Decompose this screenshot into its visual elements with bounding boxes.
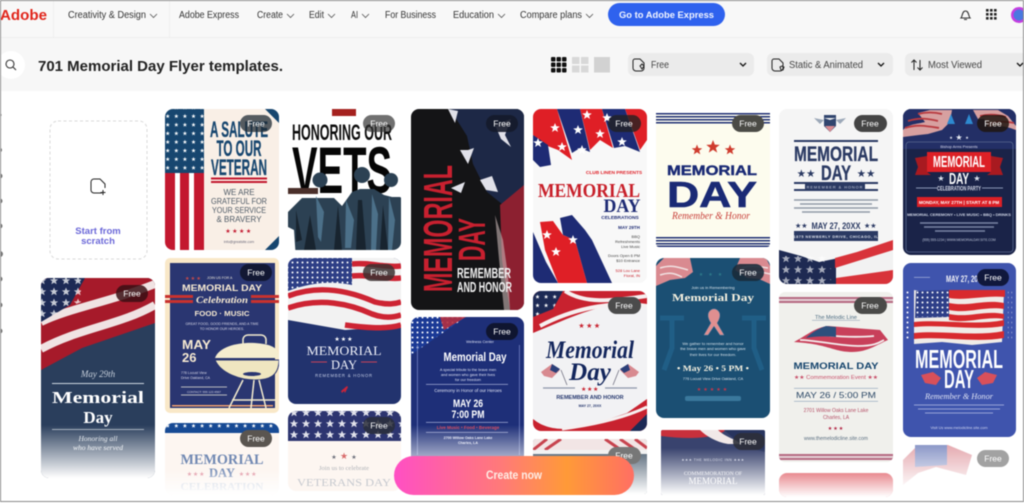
badge: Free [608, 115, 641, 132]
badge: Free: Free [493, 118, 511, 128]
card: memorial day celebration grill [165, 258, 279, 413]
card: celebration party navy: CELEBRATION PARTY [937, 186, 981, 192]
card: a salute to our veteran: YOUR SERVICE [212, 206, 266, 215]
badge: Free [116, 285, 148, 302]
card: memorial day teal ribbon: Join us in Remembering [691, 285, 735, 290]
badge: Free: Free [615, 450, 633, 460]
card: melodic line white: The Melodic Line [815, 315, 857, 321]
badge: Free: Free [861, 118, 879, 128]
card: melodic line white [779, 292, 893, 462]
card: memorial day celebration: ★★★ [187, 471, 205, 478]
ribbon [704, 309, 724, 335]
card: memorial day celebration grill: MAY [182, 337, 211, 352]
card: memorial day navy details: Charles, LA [458, 441, 478, 445]
card: memorial day celebration: DAY [209, 466, 235, 480]
card: memorial day white with flag: DAY [821, 162, 851, 185]
card: memorial day club linen: BBQ [632, 234, 640, 239]
card: flag on denim: Day [83, 408, 113, 427]
card: memorial day club linen: Refreshments [615, 239, 640, 244]
card: celebration party navy: ★ [949, 135, 953, 140]
card: memorial day club linen: Live Music [621, 244, 640, 249]
card: veterans day: Join us to celebrate [319, 465, 369, 472]
card: memorial day cream: Remember & Honor [671, 211, 750, 222]
card: a salute to our veteran: info@greatsite.com [224, 240, 254, 244]
card: memorial day script: Memorial [545, 337, 634, 364]
nav links: Edit [309, 10, 324, 21]
icon: bell [961, 11, 970, 20]
badge: Free [486, 323, 518, 340]
card: memorial day teal ribbon: Memorial Day [672, 292, 755, 304]
card: melodic line white: MAY 26 / 5:00 PM [796, 390, 876, 400]
badge: Free: Free [984, 118, 1002, 128]
icon: new file [91, 179, 106, 195]
grunge flag [914, 290, 1005, 345]
card: veterans day: ★ [340, 451, 348, 461]
nav links [68, 10, 593, 21]
card: memorial day teal ribbon: the brave men and women who gave [680, 346, 747, 351]
badge: Free: Free [123, 288, 141, 298]
card: memorial day celebration grill: ★★★ [185, 276, 202, 282]
card: memorial day club linen: 528 Lou Lane [616, 268, 641, 273]
logo: Adobe: Adobe [0, 8, 47, 24]
card: memorial day navy details: Live Music • Food • Beverage [437, 425, 500, 430]
card: a salute to our veteran [165, 109, 279, 250]
card: commemoration of memorial: ★★★ THE MELODIC INN ★★★ [681, 458, 745, 462]
badge: Free: Free [739, 268, 757, 278]
badge: Free [977, 269, 1009, 286]
card: memorial day script: Day [568, 359, 612, 386]
card: memorial day club linen: CELEBRATIONS [601, 215, 640, 221]
card: melodic line white: www.themelodicline.site.com [804, 436, 868, 442]
card: memorial day white with flag: ★★ [797, 168, 815, 180]
toolbar: search and filters [0, 38, 1024, 91]
card: memorial day celebration grill: Celebration [196, 296, 248, 306]
card: remember and honor dark [411, 109, 524, 310]
card: memorial day flag waving: ★★★ [334, 336, 354, 343]
card: memorial day celebration grill: GREAT FOOD, GOOD FRIENDS, AND A TIME [185, 322, 259, 326]
card: memorial day navy details: 7:00 PM [452, 409, 484, 421]
card: memorial day club linen: Doors Open 6 PM [608, 253, 640, 258]
card: memorial day script: MAY 27, 20XX [579, 404, 602, 408]
badge: Free [363, 264, 395, 281]
card: commemoration of memorial: COMMEMORATION OF [684, 471, 742, 477]
card: celebration party navy: ★ [955, 133, 963, 142]
card: memorial day white with flag [779, 109, 893, 284]
card: memorial day script [533, 291, 647, 431]
icon: app grid [986, 9, 997, 20]
card: memorial day club linen: Floral, IN [624, 273, 640, 278]
card: memorial day teal ribbon [656, 258, 770, 418]
card: memorial day white with flag: REMEMBER & HONOR [807, 186, 863, 190]
button: Go to Adobe Express [608, 3, 725, 26]
card: flag on denim: who have served [73, 443, 123, 452]
card: remember and honor dark: REMEMBER [457, 265, 511, 282]
small flags [541, 364, 639, 385]
card: memorial day celebration: CELEBRATION [180, 481, 264, 493]
card: memorial day club linen [533, 109, 647, 283]
nav links: Education [453, 10, 494, 21]
card: memorial day blue flag: MAY 27, 20XX [946, 274, 986, 284]
card: memorial day blue flag: DAY [944, 364, 974, 394]
card: memorial day celebration grill: 778 Locust View [181, 371, 207, 375]
label: start from scratch [75, 226, 121, 247]
card: memorial day blue flag [903, 263, 1016, 437]
badge: Free [486, 115, 518, 132]
badge: Free: Free [739, 436, 757, 446]
card: celebration party navy: ★ [973, 174, 981, 183]
badge: Free: Free [615, 118, 633, 128]
badge: Free faded: Free [984, 454, 1002, 464]
nav links: Adobe Express [179, 10, 239, 21]
badge: Free: Free [861, 300, 879, 310]
card: a salute to our veteran: & BRAVERY [216, 215, 262, 224]
badge: Free [240, 264, 272, 281]
card: remember and honor dark: DAY [452, 218, 494, 261]
card: memorial day script: REMEMBER AND HONOR [556, 395, 624, 401]
card: memorial day navy details: 2700 Willow Oaks Lane Lake [444, 436, 492, 440]
bronze statues [287, 166, 402, 251]
card: memorial day navy details [410, 316, 525, 457]
card: veterans day: VETERANS DAY [297, 477, 391, 489]
card: memorial day club linen: $10 Entrance [616, 258, 641, 263]
card: commemoration of memorial: MEMORIAL [688, 476, 738, 486]
filter: Free [628, 53, 754, 76]
card: memorial day navy details: Wellness Center [466, 340, 495, 344]
grill [215, 335, 279, 408]
card: honoring our vets [288, 109, 405, 260]
filter: Most Viewed: Most Viewed [928, 60, 982, 71]
heading: 701 Memorial Day Flyer templates. [38, 58, 283, 75]
badge: Free: Free [370, 118, 388, 128]
card: memorial day celebration grill: Drive Oakland, CA [181, 376, 211, 380]
badge: Free: Free [247, 118, 265, 128]
badge: Free [977, 115, 1009, 132]
badge: Free: Free [370, 268, 388, 278]
card: memorial day club linen: CLUB LINEN PRESENTS [586, 170, 643, 176]
card: honoring our vets: VETS [292, 133, 392, 207]
card: a salute to our veteran: A SALUTE [210, 117, 268, 142]
badge: Free [854, 115, 887, 132]
card: memorial day white with flag: ★★ [795, 222, 808, 230]
nav links: Create [257, 10, 283, 21]
card: memorial day celebration grill: CONTACT: 555 123 4567 [187, 390, 221, 394]
badge: Free [732, 264, 764, 281]
card: veterans day: ★ [351, 454, 357, 461]
card: memorial day teal ribbon: We gather to remember and honor [682, 341, 744, 346]
card: flag on denim: Honoring all [78, 434, 117, 443]
filter: Free: Free [651, 60, 669, 71]
card: melodic line white: 2701 Willow Oaks Lane Lake [804, 408, 869, 414]
card: memorial day navy details: A special tribute to the brave men [440, 368, 496, 372]
card: memorial day celebration [165, 423, 279, 495]
card: memorial day cream: MEMORIAL [667, 162, 758, 178]
card: memorial day script: ★★★ [581, 386, 599, 393]
card: memorial day club linen: MEMORIAL [538, 180, 640, 202]
card: celebration party navy: ★ [965, 135, 969, 140]
button: Create now [394, 456, 634, 495]
top navigation bar [0, 0, 1024, 38]
card: celebration party navy: MEMORIAL CEREMONY • LIVE MUSIC • BBQ • DRINKS [907, 212, 1011, 217]
card: honoring our vets: HONORING OUR [292, 120, 392, 145]
card: melodic line white: MEMORIAL DAY [794, 361, 879, 372]
filter: Static & Animated: Static & Animated [789, 60, 863, 71]
card: memorial day faded slate [533, 439, 647, 494]
card: memorial day cream: DAY [667, 174, 757, 215]
card: memorial day teal ribbon: ★★★★★ [697, 387, 729, 393]
badge: Free: Free [615, 300, 633, 310]
card: veterans day: ★ [331, 454, 337, 461]
card: celebration party navy: MONDAY, MAY 27TH | START AT 8 PM [919, 200, 999, 205]
card: memorial day teal ribbon: • May 26 • 5 PM • [677, 364, 749, 373]
card: memorial day script: ★★★ [578, 322, 602, 330]
left sidebar remnants [0, 114, 3, 334]
card: celebration party navy: Bishop Arms Presents [940, 145, 978, 149]
card: memorial day celebration grill: 26 [182, 350, 196, 365]
card: memorial day celebration: MEMORIAL [180, 452, 264, 468]
card: a salute to our veteran: ★★★★ [225, 228, 253, 235]
badge: Free: Free [247, 434, 265, 444]
card: memorial day navy details: Memorial Day [444, 350, 507, 364]
card: remember and honor dark: AND HONOR [457, 279, 512, 296]
label: start from scratch: scratch [81, 236, 115, 247]
card: veterans day [288, 411, 401, 491]
card: memorial day celebration grill: MEMORIAL DAY [182, 283, 263, 294]
card: memorial day blue flag: Visit Us www.melodicline.site.com [930, 426, 988, 430]
card: flag on denim: May 29th [80, 369, 116, 379]
badge: Free: Free [493, 326, 511, 336]
card: celebration party navy: DAY [949, 171, 969, 188]
card: memorial day celebration grill: JOIN US FOR A [207, 276, 233, 280]
card: melodic line white: ★★ Commemoration Event ★★ [794, 375, 878, 381]
card: memorial day celebration: ★★★ [239, 471, 257, 478]
badge: Free: Free [370, 420, 388, 430]
card: a salute to our veteran: TO OUR [216, 136, 262, 161]
card: flag on denim: Memorial [52, 388, 144, 407]
label: start from scratch: Start from [75, 226, 121, 237]
card: melodic line white: Charles, LA [823, 415, 850, 421]
card: memorial day navy details: Ceremony in Honor of our Heroes [434, 388, 503, 393]
card: a salute to our veteran: WE ARE [223, 188, 255, 197]
card: celebration party navy: (555) 555-1234 | WWW.MEMORIALDAY.SITE.COM [922, 238, 996, 242]
card: memorial day white with flag: MEMORIAL [794, 143, 878, 166]
card: flag on denim [41, 278, 155, 478]
card: melodic line white: ★★★ [828, 426, 844, 432]
card: memorial day white with flag: ★★ [857, 168, 875, 180]
badge: Free faded [977, 450, 1009, 467]
button: Create now: Create now [486, 470, 542, 482]
card: memorial day navy details: MAY 26 [453, 398, 483, 410]
button: Go to Adobe Express: Go to Adobe Express [619, 10, 714, 21]
card: memorial day white with flag: 1875 NEWBERLY DRIVE, CHICAGO, IL [794, 235, 879, 239]
card: memorial day flag waving [288, 258, 401, 404]
card: a salute to our veteran: VETERAN [211, 155, 267, 180]
nav links: Creativity & Design [68, 10, 146, 21]
filter: Most Viewed [905, 53, 1024, 76]
icon: search [0, 51, 25, 79]
badge: Free [240, 115, 272, 132]
card: memorial day cream [656, 113, 770, 247]
badge: Free: Free [984, 272, 1002, 282]
card: memorial day white with flag: ★★ [864, 222, 877, 230]
card: celebration party navy: MEMORIAL [933, 154, 985, 171]
card: memorial day celebration grill: TO HONOR OUR HEROES. [200, 327, 244, 331]
waving flag [794, 326, 888, 352]
badge: Free: Free [739, 118, 757, 128]
card: celebration party navy [903, 109, 1016, 255]
icon: user avatar [1011, 7, 1024, 23]
card: commemoration of memorial [661, 430, 765, 495]
badge: Free [363, 115, 395, 132]
card: memorial day flag waving: DAY [331, 358, 357, 372]
card: celebration party navy: ★ [937, 174, 945, 183]
card: faded flag [903, 445, 1016, 490]
card: memorial day celebration grill: FOOD · MUSIC [194, 309, 250, 318]
filter: Static & Animated [767, 53, 893, 76]
nav links: AI [351, 10, 358, 21]
nav links: For Business [385, 10, 436, 21]
card: a salute to our veteran: GRATEFUL FOR [211, 197, 267, 206]
badge: Free: Free [247, 268, 265, 278]
card: memorial day teal ribbon: their lives for our freedom. [690, 352, 736, 357]
card: memorial day blue flag: Remember & Honor [924, 392, 994, 401]
badge: Free [854, 297, 887, 314]
card: memorial day navy details: and women who gave their lives [441, 373, 495, 377]
card: memorial day flag waving: MEMORIAL [306, 344, 382, 358]
card: memorial day club linen: MAY 29TH [618, 225, 640, 230]
card: remember and honor dark: MEMORIAL [415, 165, 461, 292]
panel: start from scratch [50, 121, 147, 259]
view toggle icons [551, 57, 610, 72]
card: memorial day teal ribbon: ★★★ [699, 272, 727, 278]
nav links: Compare plans [520, 10, 582, 21]
card: memorial day flag waving: REMEMBER & HONOR [315, 373, 373, 378]
card: memorial day navy details: for our freedom [455, 378, 481, 382]
card: memorial day white with flag: MAY 27, 20XX [812, 221, 861, 232]
card: memorial day club linen: DAY [604, 196, 641, 217]
card: memorial day teal ribbon: 776 Locust View Drive Oakland, CA [683, 377, 744, 381]
card: faded red [779, 473, 893, 497]
